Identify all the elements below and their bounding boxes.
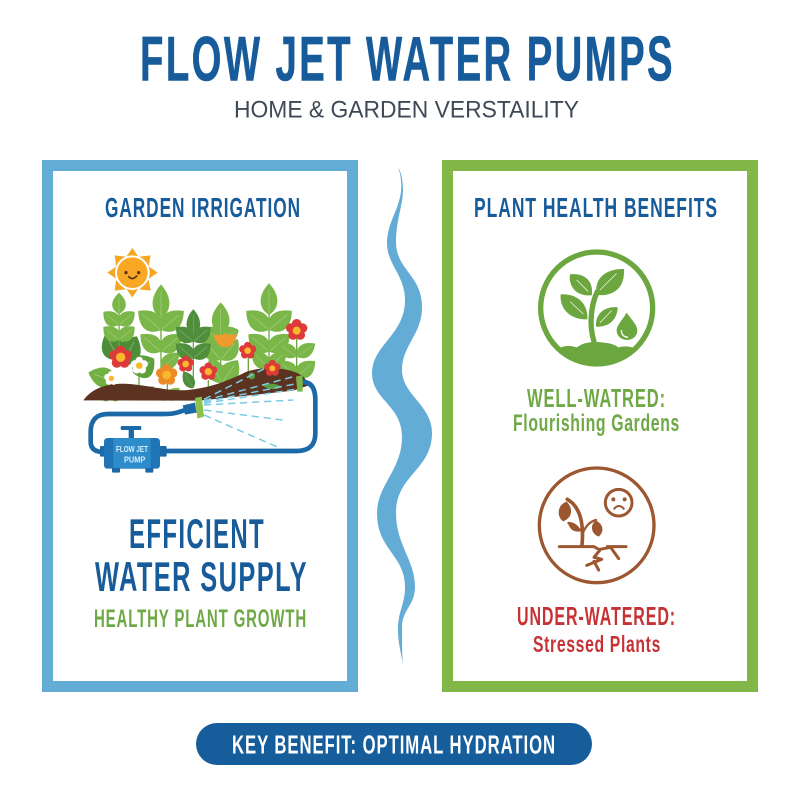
wave divider <box>372 167 432 667</box>
heading: garden irrigation: GARDEN IRRIGATION <box>105 192 301 223</box>
icon: stressed plant <box>539 468 654 583</box>
label: flourishing gardens: Flourishing Gardens <box>513 410 680 437</box>
label: well-watered: WELL-WATRED: <box>527 383 666 413</box>
icon: sun <box>107 248 158 297</box>
headline: efficient water supply: WATER SUPPLY <box>95 553 308 600</box>
headline: efficient water supply <box>95 510 308 600</box>
panel: garden irrigation <box>48 166 352 686</box>
water spray <box>204 368 295 447</box>
label: under-watered: UNDER-WATERED: <box>517 601 676 631</box>
hose nozzle <box>183 375 303 419</box>
foliage <box>85 283 320 404</box>
illustration: garden with pump <box>83 248 320 473</box>
icon: healthy plant <box>541 252 653 364</box>
headline: efficient water supply: EFFICIENT <box>129 510 265 557</box>
tagline: healthy plant growth: HEALTHY PLANT GROWTH <box>94 605 307 633</box>
subtitle: HOME & GARDEN VERSTAILITY <box>234 96 579 124</box>
icon: pump: PUMP <box>124 455 146 465</box>
soil bed <box>83 368 310 401</box>
flowers <box>104 319 307 389</box>
icon: pump <box>100 426 167 473</box>
hose <box>91 382 315 452</box>
panel: plant health benefits <box>448 166 752 686</box>
label: stressed plants: Stressed Plants <box>533 631 661 657</box>
key benefit pill: KEY BENEFIT: OPTIMAL HYDRATION <box>232 730 556 760</box>
icon: pump: FLOW JET <box>116 444 149 454</box>
key benefit pill <box>196 723 592 765</box>
